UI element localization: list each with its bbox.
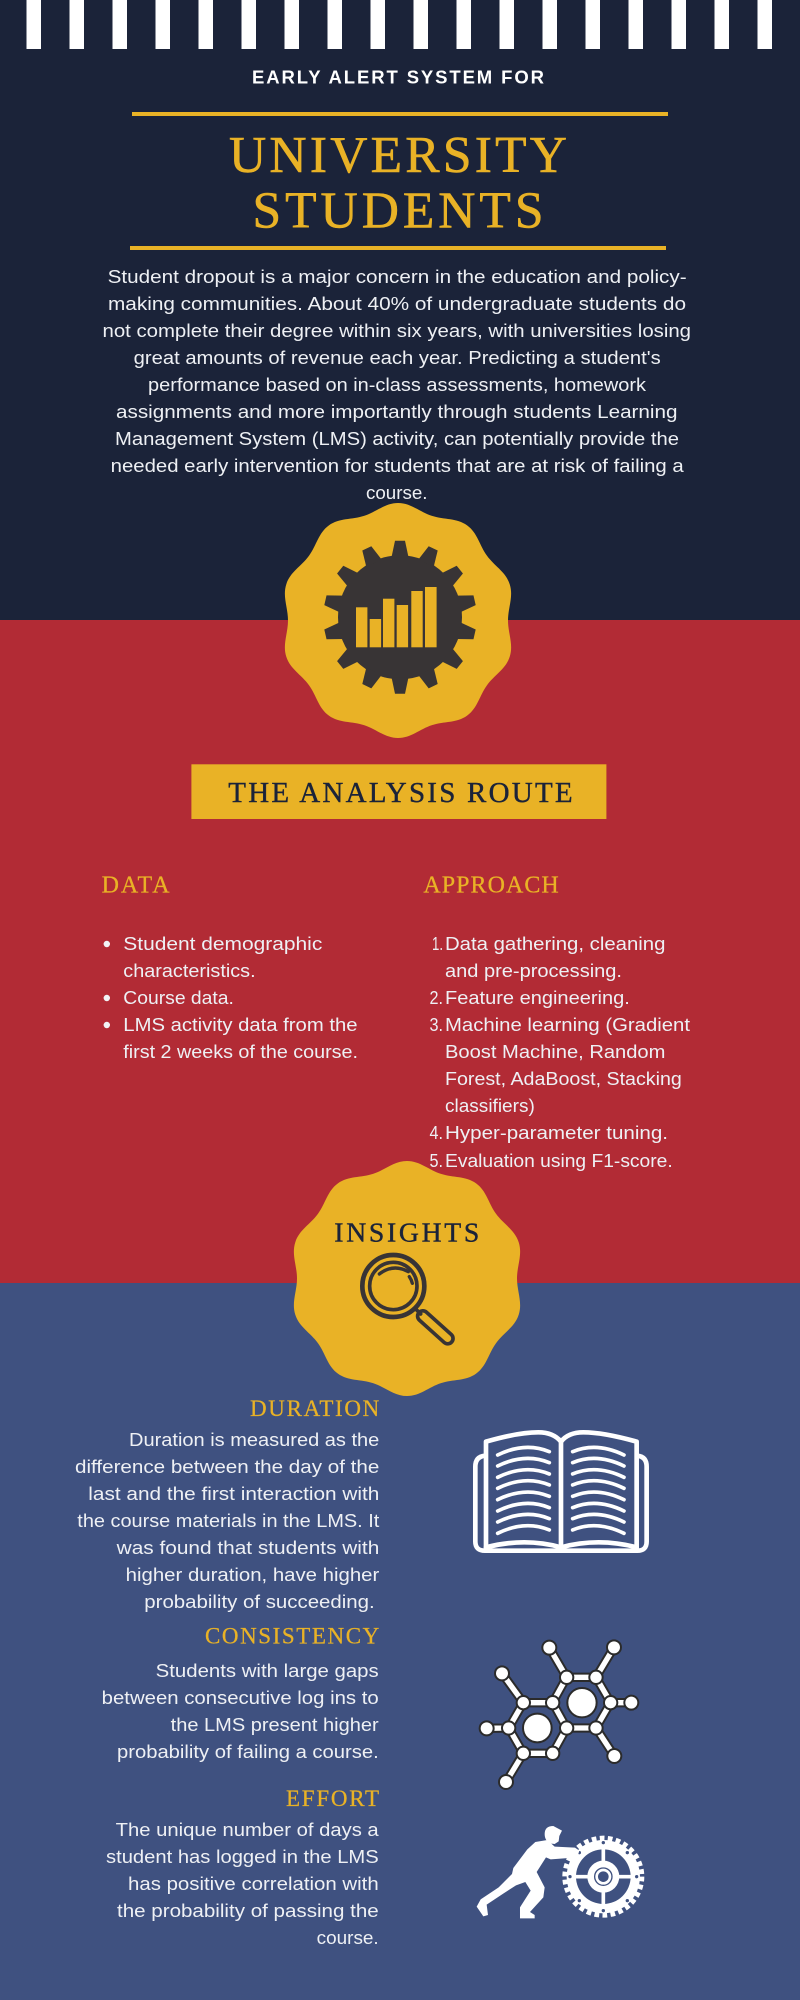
approach list: Evaluation using F1-score. bbox=[445, 1150, 673, 1171]
approach list: Machine learning (Gradient bbox=[445, 1014, 690, 1035]
title rule bottom bbox=[130, 246, 666, 250]
text: duration: difference between the day of the bbox=[75, 1456, 379, 1477]
icon: molecule network bbox=[480, 1640, 638, 1789]
heading: duration: DURATION bbox=[250, 1396, 380, 1421]
kicker heading: EARLY ALERT SYSTEM FOR bbox=[252, 66, 544, 87]
text: effort bbox=[106, 1819, 380, 1948]
approach list: 2. bbox=[430, 987, 443, 1008]
text: duration bbox=[75, 1429, 379, 1612]
intro paragraph: assignments and more importantly through students Learning bbox=[116, 401, 678, 422]
data list: characteristics. bbox=[123, 960, 256, 981]
intro paragraph bbox=[102, 266, 691, 503]
icon: open book bbox=[475, 1432, 647, 1551]
approach list: 1. bbox=[432, 933, 443, 954]
approach list bbox=[430, 933, 690, 1171]
title line 1: UNIVERSITY bbox=[229, 127, 567, 184]
title block bbox=[130, 66, 668, 250]
gear wheel bbox=[565, 1839, 641, 1915]
panel: navy header background bbox=[0, 0, 800, 621]
data list bbox=[104, 933, 358, 1062]
icon: bar chart bbox=[356, 587, 437, 647]
text: consistency: Students with large gaps bbox=[156, 1660, 379, 1681]
data list: first 2 weeks of the course. bbox=[123, 1041, 358, 1062]
wavy gold badge bbox=[294, 1161, 520, 1396]
approach list: 4. bbox=[430, 1122, 443, 1143]
text: duration: last and the first interaction with bbox=[88, 1483, 379, 1504]
badge: insights bbox=[294, 1161, 520, 1396]
approach list: Hyper-parameter tuning. bbox=[445, 1122, 668, 1143]
top stripes bbox=[26, 0, 772, 49]
data list: LMS activity data from the bbox=[123, 1014, 358, 1035]
approach list: 5. bbox=[430, 1150, 443, 1171]
intro paragraph: Student dropout is a major concern in the education and policy- bbox=[108, 266, 687, 287]
text: effort: the probability of passing the bbox=[117, 1900, 379, 1921]
pushing figure bbox=[477, 1826, 579, 1918]
approach list: Boost Machine, Random bbox=[445, 1041, 665, 1062]
panel: red analysis background bbox=[0, 620, 800, 1284]
text: duration: was found that students with bbox=[116, 1537, 379, 1558]
text: consistency: probability of failing a course. bbox=[117, 1741, 379, 1762]
icon: gear bbox=[324, 541, 476, 694]
intro paragraph: course. bbox=[366, 482, 428, 503]
intro paragraph: Management System (LMS) activity, can potentially provide the bbox=[115, 428, 679, 449]
approach list: and pre-processing. bbox=[445, 960, 622, 981]
heading: the analysis route bbox=[191, 764, 606, 819]
approach list: Forest, AdaBoost, Stacking bbox=[445, 1068, 682, 1089]
badge: analysis gear bbox=[285, 503, 511, 738]
text: consistency: the LMS present higher bbox=[171, 1714, 379, 1735]
text: effort: The unique number of days a bbox=[116, 1819, 380, 1840]
data list: Course data. bbox=[123, 987, 234, 1008]
heading: consistency: CONSISTENCY bbox=[205, 1624, 380, 1649]
heading: data: DATA bbox=[102, 873, 170, 899]
intro paragraph: not complete their degree within six years, with universities losing bbox=[102, 320, 691, 341]
icon: magnifying glass bbox=[362, 1255, 455, 1346]
heading: insights: INSIGHTS bbox=[334, 1217, 479, 1248]
text: duration: Duration is measured as the bbox=[129, 1429, 379, 1450]
text: effort: has positive correlation with bbox=[128, 1873, 379, 1894]
text: effort: course. bbox=[317, 1927, 379, 1948]
text: consistency: between consecutive log ins to bbox=[102, 1687, 379, 1708]
intro paragraph: performance based on in-class assessments, homework bbox=[148, 374, 647, 395]
heading: effort: EFFORT bbox=[286, 1786, 379, 1811]
approach list: Feature engineering. bbox=[445, 987, 630, 1008]
icon: person pushing gear bbox=[477, 1826, 641, 1918]
intro paragraph: making communities. About 40% of undergraduate students do bbox=[108, 293, 686, 314]
heading: approach: APPROACH bbox=[423, 873, 559, 899]
text: duration: the course materials in the LMS. It bbox=[77, 1510, 379, 1531]
text: effort: student has logged in the LMS bbox=[106, 1846, 379, 1867]
intro paragraph: great amounts of revenue each year. Predicting a student's bbox=[134, 347, 661, 368]
approach list: classifiers) bbox=[445, 1095, 535, 1116]
data list: Student demographic bbox=[123, 933, 322, 954]
title line 2: STUDENTS bbox=[252, 182, 544, 240]
panel: blue insights background bbox=[0, 1283, 800, 2000]
approach list: 3. bbox=[430, 1014, 443, 1035]
wavy gold badge bbox=[285, 503, 511, 738]
text: duration: higher duration, have higher bbox=[126, 1564, 379, 1585]
approach list: Data gathering, cleaning bbox=[445, 933, 665, 954]
text: duration: probability of succeeding. bbox=[144, 1591, 375, 1612]
heading: the analysis route: THE ANALYSIS ROUTE bbox=[228, 777, 573, 809]
intro paragraph: needed early intervention for students that are at risk of failing a bbox=[111, 455, 685, 476]
title rule top bbox=[132, 112, 668, 116]
text: consistency bbox=[102, 1660, 379, 1762]
